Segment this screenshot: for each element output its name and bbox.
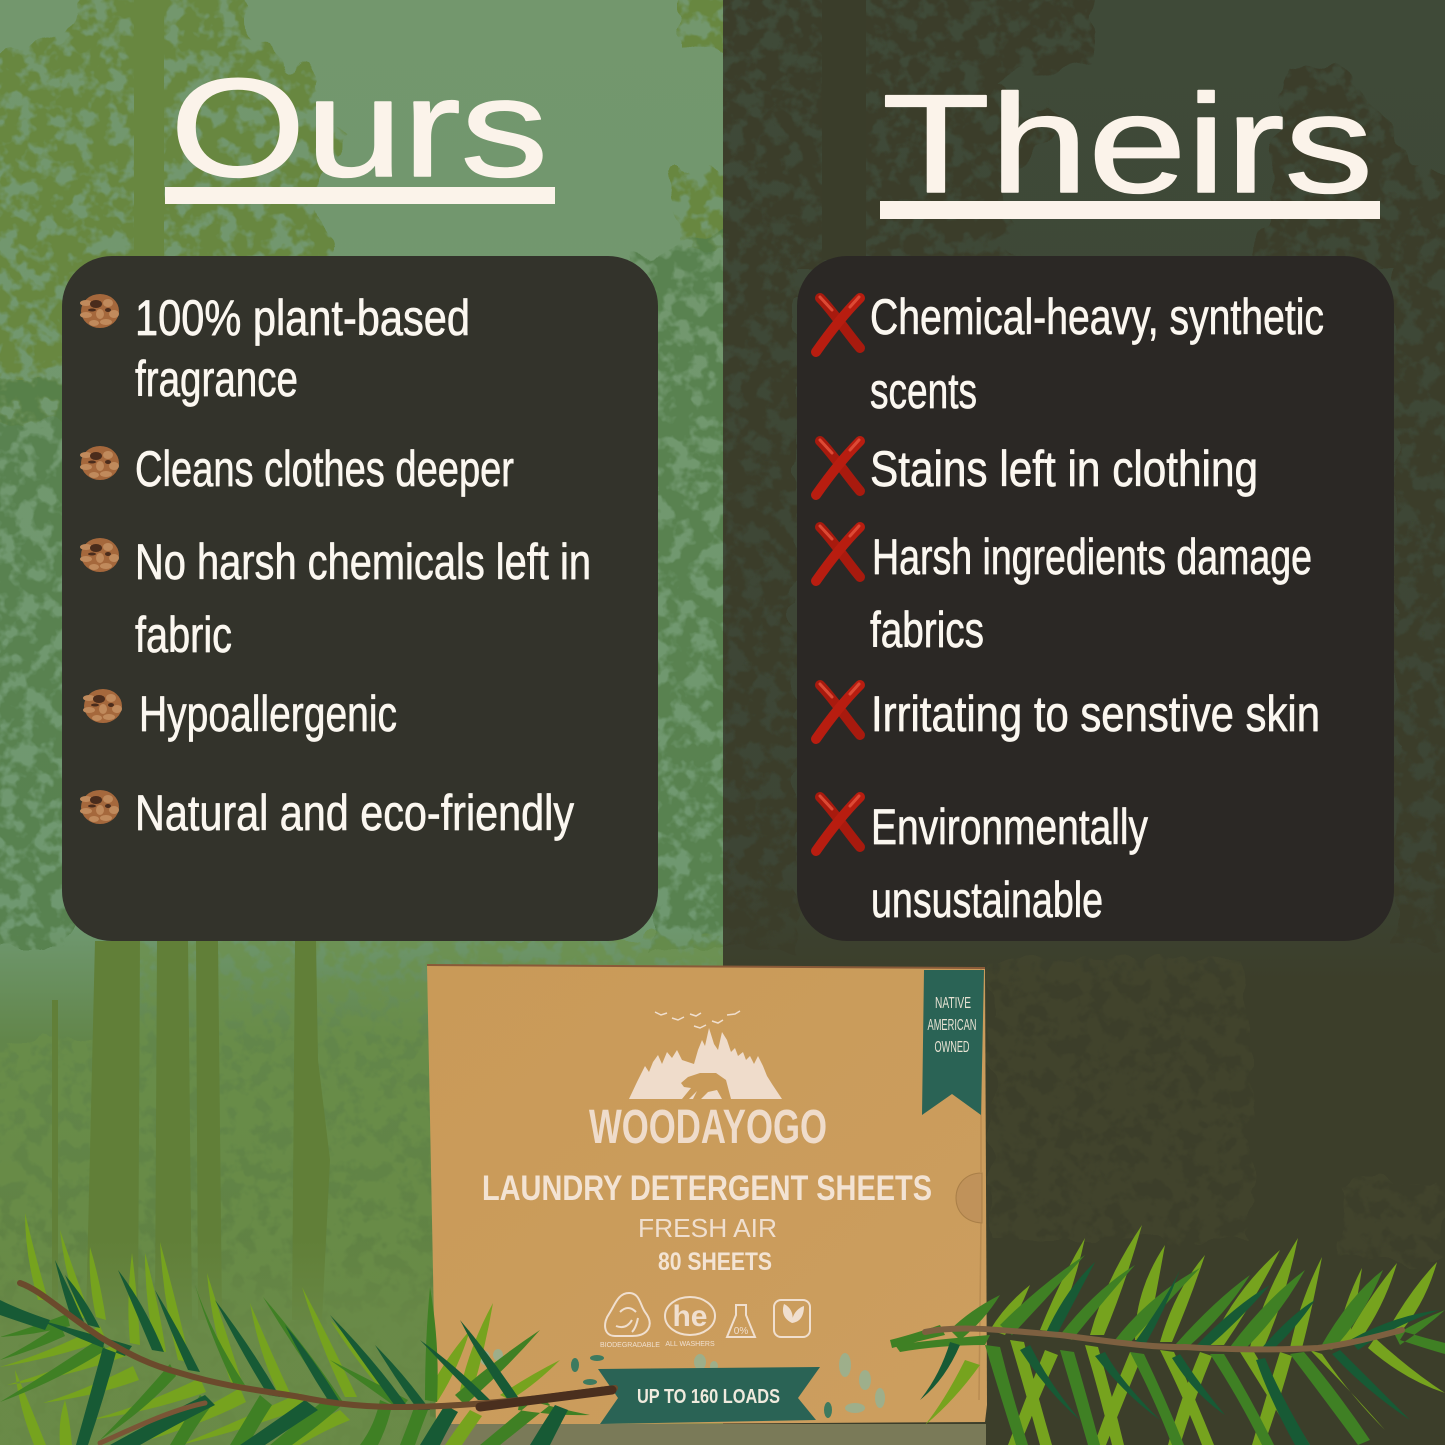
pine branch: left [0,1213,615,1445]
item: no harsh chemicals: fabric [135,607,232,663]
item: harsh ingredients [816,526,1312,658]
foliage: top right tree [700,0,1445,950]
background: left green forest panel [0,0,760,1445]
item: no harsh chemicals: No harsh chemicals left in [135,534,591,590]
title: Ours: Ours [170,49,548,206]
item: natural and eco-friendly: Natural and eco-friendly [135,785,574,841]
icons: certifications [600,1293,810,1349]
icon: biodegradable [600,1293,660,1349]
foliage: lower right forest [990,960,1445,1260]
icon: all washers he [665,1297,715,1348]
panel: theirs drawbacks [797,256,1394,941]
item: environmentally unsustainable: unsustainable [871,872,1103,928]
banner: up to 160 loads: UP TO 160 LOADS [637,1386,780,1408]
item: cleans deeper [80,441,514,497]
item: stains: Stains left in clothing [870,441,1258,497]
ribbon: native american owned: OWNED [934,1039,970,1056]
foliage: lower left forest [0,935,740,1445]
sheet count: 80 SHEETS [658,1248,772,1276]
item: plant-based fragrance: fragrance [135,351,298,407]
brand name: WOODAYOGO [589,1101,827,1154]
icon: biodegradable: BIODEGRADABLE [600,1342,660,1349]
item: hypoallergenic [83,686,397,742]
item: plant-based fragrance: 100% plant-based [135,290,470,346]
logo: birds, trees and bear [629,1011,782,1099]
bottom strip under box [436,1424,986,1445]
pine branch: right [890,1225,1445,1445]
product box [427,965,987,1425]
item: harsh ingredients: Harsh ingredients damage [872,529,1312,585]
item: no harsh chemicals [80,534,591,663]
tree trunk: top right [822,0,866,260]
item: chemical-heavy scents: scents [870,363,977,419]
item: irritating: Irritating to senstive skin [871,686,1320,742]
item: chemical-heavy scents: Chemical-heavy, synthetic [870,289,1324,345]
background: right dark forest panel [723,0,1445,1268]
tree trunks: lower left forest [52,941,330,1320]
icon: phosphate free flask [727,1305,755,1337]
scent: FRESH AIR [638,1213,777,1243]
foliage: top left tree [0,0,760,420]
banner: up to 160 loads [598,1367,820,1424]
ribbon: native american owned [922,970,984,1115]
tree trunk: top left [134,0,164,260]
item: harsh ingredients: fabrics [870,602,984,658]
item: hypoallergenic: Hypoallergenic [139,686,397,742]
icon: all washers he: ALL WASHERS [665,1341,715,1348]
item: chemical-heavy scents [816,289,1324,419]
ground foliage haze [0,1298,425,1445]
item: plant-based fragrance [80,290,470,407]
icon: eco friendly [774,1300,810,1337]
title: Theirs: Theirs [882,65,1373,222]
icon: phosphate free flask: 0% [734,1326,748,1337]
leaf decorations on box [480,1349,885,1418]
item: cleans deeper: Cleans clothes deeper [135,441,514,497]
foliage: side strips [0,225,760,950]
icon: all washers he: he [672,1300,708,1333]
ribbon: native american owned: NATIVE [935,995,971,1012]
ribbon: native american owned: AMERICAN [928,1017,976,1034]
item: environmentally unsustainable: Environmentally [871,799,1148,855]
panel: ours benefits [62,256,658,941]
product name: LAUNDRY DETERGENT SHEETS [482,1169,932,1208]
item: environmentally unsustainable [816,796,1148,928]
